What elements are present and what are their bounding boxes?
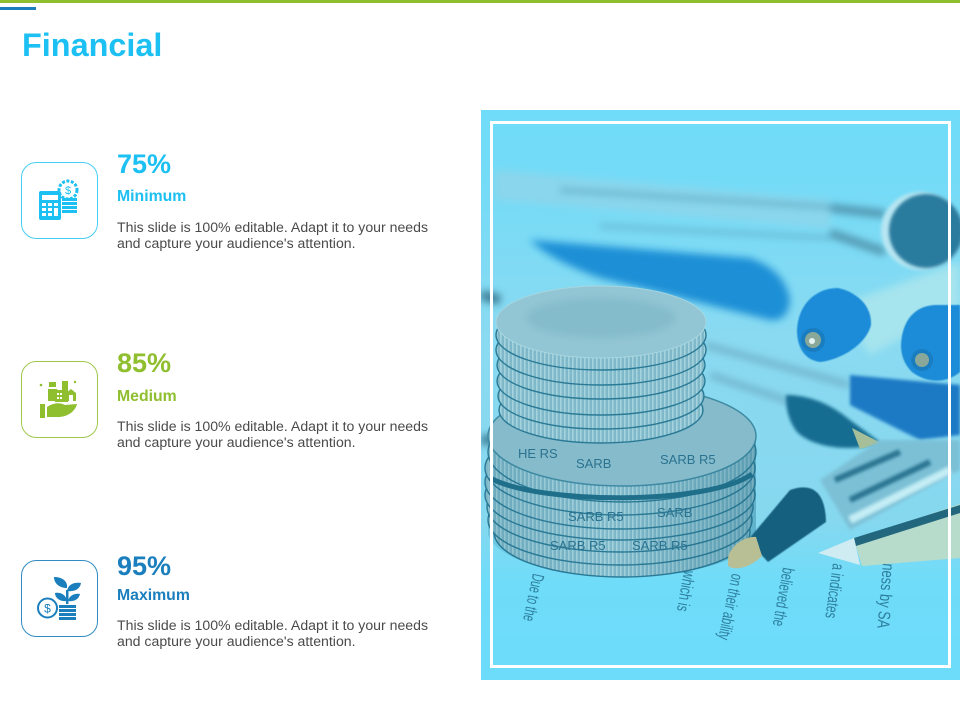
photo panel: coins and pens with blue tint — [481, 110, 960, 680]
rotated paper text — [519, 562, 898, 642]
description: and capture your audience's attention. — [117, 633, 356, 649]
coin stacks: SARB R5 — [632, 538, 688, 553]
description: and capture your audience's attention. — [117, 235, 356, 251]
description: This slide is 100% editable. Adapt it to your needs — [117, 418, 428, 434]
description — [117, 418, 428, 450]
rotated paper text: Due to the — [519, 572, 548, 623]
icon: plant growing from coins: $ — [44, 602, 51, 616]
coin stacks: SARB — [657, 505, 692, 520]
description: This slide is 100% editable. Adapt it to your needs — [117, 617, 428, 633]
photo background — [481, 110, 960, 680]
coin stacks — [485, 286, 756, 577]
title: Financial — [22, 27, 162, 63]
blue pen tips — [786, 288, 960, 449]
label: Maximum — [117, 587, 190, 604]
description — [117, 219, 428, 251]
blurred background pens — [481, 170, 960, 440]
item: minimum — [21, 149, 428, 251]
gold pen — [818, 504, 960, 566]
description: and capture your audience's attention. — [117, 434, 356, 450]
top green bar — [0, 0, 960, 3]
white frame — [492, 122, 950, 666]
item: medium — [21, 348, 428, 450]
coin stacks: SARB — [576, 456, 611, 471]
coin stacks: SARB R5 — [550, 538, 606, 553]
big black pen — [728, 487, 826, 568]
rotated paper text: ness by SA — [873, 563, 898, 630]
rotated paper text: believed the — [769, 566, 798, 628]
icon: calculator and coins: $ — [65, 185, 71, 197]
coin stacks: SARB R5 — [660, 452, 716, 467]
blue accent line — [0, 7, 36, 10]
coin stacks: SARB R5 — [568, 509, 624, 524]
description: This slide is 100% editable. Adapt it to your needs — [117, 219, 428, 235]
dark coin gap — [490, 474, 752, 498]
rotated paper text: on their ability — [714, 572, 747, 642]
rotated paper text: a indicates — [821, 562, 848, 620]
item: maximum — [21, 551, 428, 649]
label: Minimum — [117, 188, 186, 205]
description — [117, 617, 428, 649]
mottled pen barrel — [820, 440, 960, 530]
icon: plant growing from coins — [21, 560, 98, 637]
label: Medium — [117, 388, 177, 405]
icon: hand holding property — [21, 361, 98, 438]
percentage: 75% — [117, 149, 171, 179]
icon: calculator and coins — [21, 162, 98, 239]
coin lettering: HE RS — [518, 446, 558, 461]
rotated paper text: which is — [673, 569, 699, 613]
percentage: 95% — [117, 551, 171, 581]
percentage: 85% — [117, 348, 171, 378]
